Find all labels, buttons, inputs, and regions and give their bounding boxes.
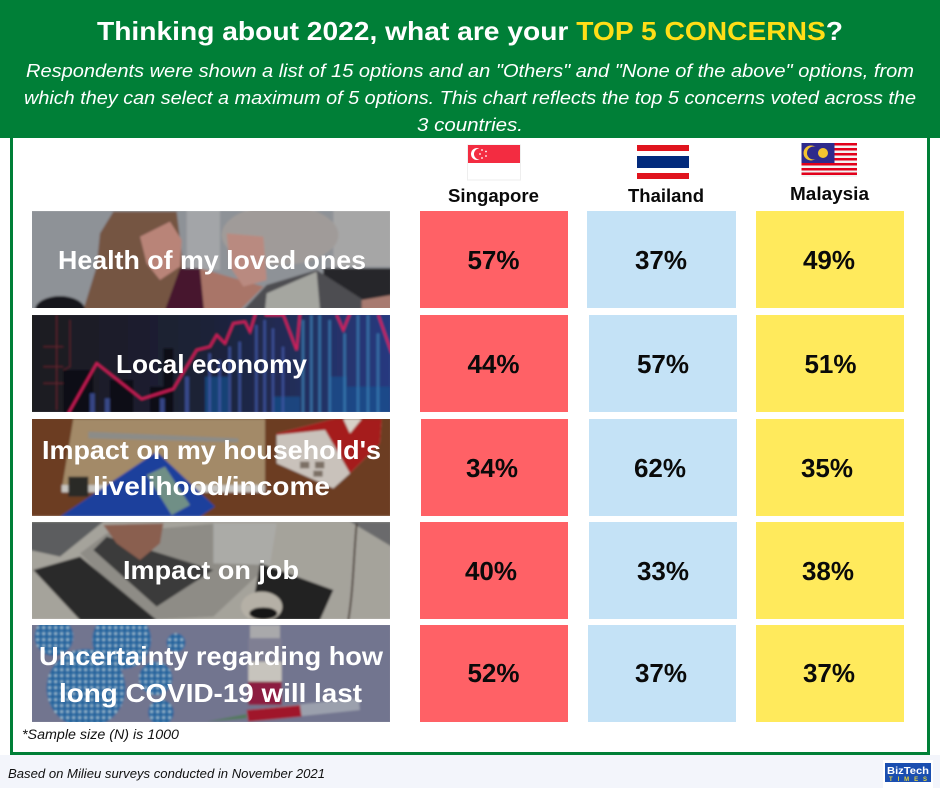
cell: 44% — [467, 349, 520, 379]
cell — [589, 315, 737, 412]
icon: Singapore flag — [468, 145, 520, 180]
column header: Singapore — [448, 145, 539, 206]
subtitle: which they can select a maximum of 5 options. This chart reflects the top 5 concerns voted across the — [24, 88, 916, 108]
cell: 52% — [467, 658, 520, 688]
row 3 image label: Impact on my household's livelihood/income: Impact on my household's — [42, 435, 381, 465]
source note: Based on Milieu surveys conducted in November 2021 — [8, 766, 325, 781]
row 4 image label: Impact on job: Impact on job — [123, 555, 299, 585]
cell: 40% — [465, 556, 517, 586]
cell: 34% — [466, 453, 518, 483]
row 5 image label: Uncertainty regarding how long COVID-19 will last: Uncertainty regarding how — [39, 641, 384, 671]
header banner — [0, 0, 940, 138]
cell: 38% — [802, 556, 854, 586]
icon: Thailand flag — [637, 145, 689, 179]
cell — [756, 211, 904, 308]
row 3 image label: Impact on my household's livelihood/income: livelihood/income — [93, 471, 330, 501]
title: Thinking about 2022, what are your TOP 5 CONCERNS ? — [97, 16, 843, 46]
cell — [420, 211, 568, 308]
cell: 57% — [467, 245, 520, 275]
column header: Malaysia: Malaysia — [790, 184, 870, 204]
column header: Thailand: Thailand — [628, 186, 704, 206]
logo: BizTech Times: BizTech — [887, 765, 929, 777]
cell — [420, 522, 568, 619]
cell — [588, 625, 736, 722]
chart frame — [12, 130, 928, 754]
cell — [420, 625, 568, 722]
logo: BizTech Times — [883, 760, 933, 788]
subtitle — [24, 61, 916, 135]
cell — [589, 522, 737, 619]
row 1 image label: Health of my loved ones — [32, 211, 390, 308]
cell: 37% — [635, 658, 687, 688]
cell — [756, 419, 904, 516]
logo: BizTech Times: TIMES — [889, 777, 927, 783]
footer background — [0, 755, 940, 788]
cell: 62% — [634, 453, 686, 483]
cell — [421, 419, 568, 516]
Thailand values column — [587, 211, 737, 722]
cell — [589, 419, 737, 516]
row 2 image label: Local economy: Local economy — [116, 349, 308, 379]
row 2 image label: Local economy — [30, 313, 392, 413]
cell: 35% — [801, 453, 853, 483]
Malaysia values column — [756, 211, 904, 722]
sample size note: *Sample size (N) is 1000 — [22, 727, 180, 742]
row 5 image label: Uncertainty regarding how long COVID-19 will last: long COVID-19 will last — [59, 678, 362, 708]
cell — [756, 625, 904, 722]
cell: 51% — [804, 349, 857, 379]
subtitle: Respondents were shown a list of 15 options and an "Others" and "None of the above" options, from — [26, 61, 914, 81]
cell: 37% — [635, 245, 687, 275]
icon: Malaysia flag — [802, 143, 857, 177]
row 4 image label: Impact on job — [30, 520, 392, 622]
Singapore values column — [420, 211, 568, 722]
cell: 33% — [637, 556, 689, 586]
row 1 image label: Health of my loved ones: Health of my loved ones — [58, 245, 366, 275]
cell: 57% — [637, 349, 689, 379]
cell — [756, 522, 904, 619]
column header: Malaysia — [790, 143, 870, 204]
cell — [587, 211, 736, 308]
cell — [756, 315, 904, 412]
subtitle: 3 countries. — [417, 115, 523, 135]
row 5 image label: Uncertainty regarding how long COVID-19 will last — [32, 625, 390, 722]
column header: Thailand — [628, 145, 704, 206]
cell: 37% — [803, 658, 855, 688]
cell — [420, 315, 568, 412]
cell: 49% — [803, 245, 855, 275]
column header: Singapore: Singapore — [448, 186, 539, 206]
row 3 image label: Impact on my household's livelihood/income — [30, 417, 392, 517]
